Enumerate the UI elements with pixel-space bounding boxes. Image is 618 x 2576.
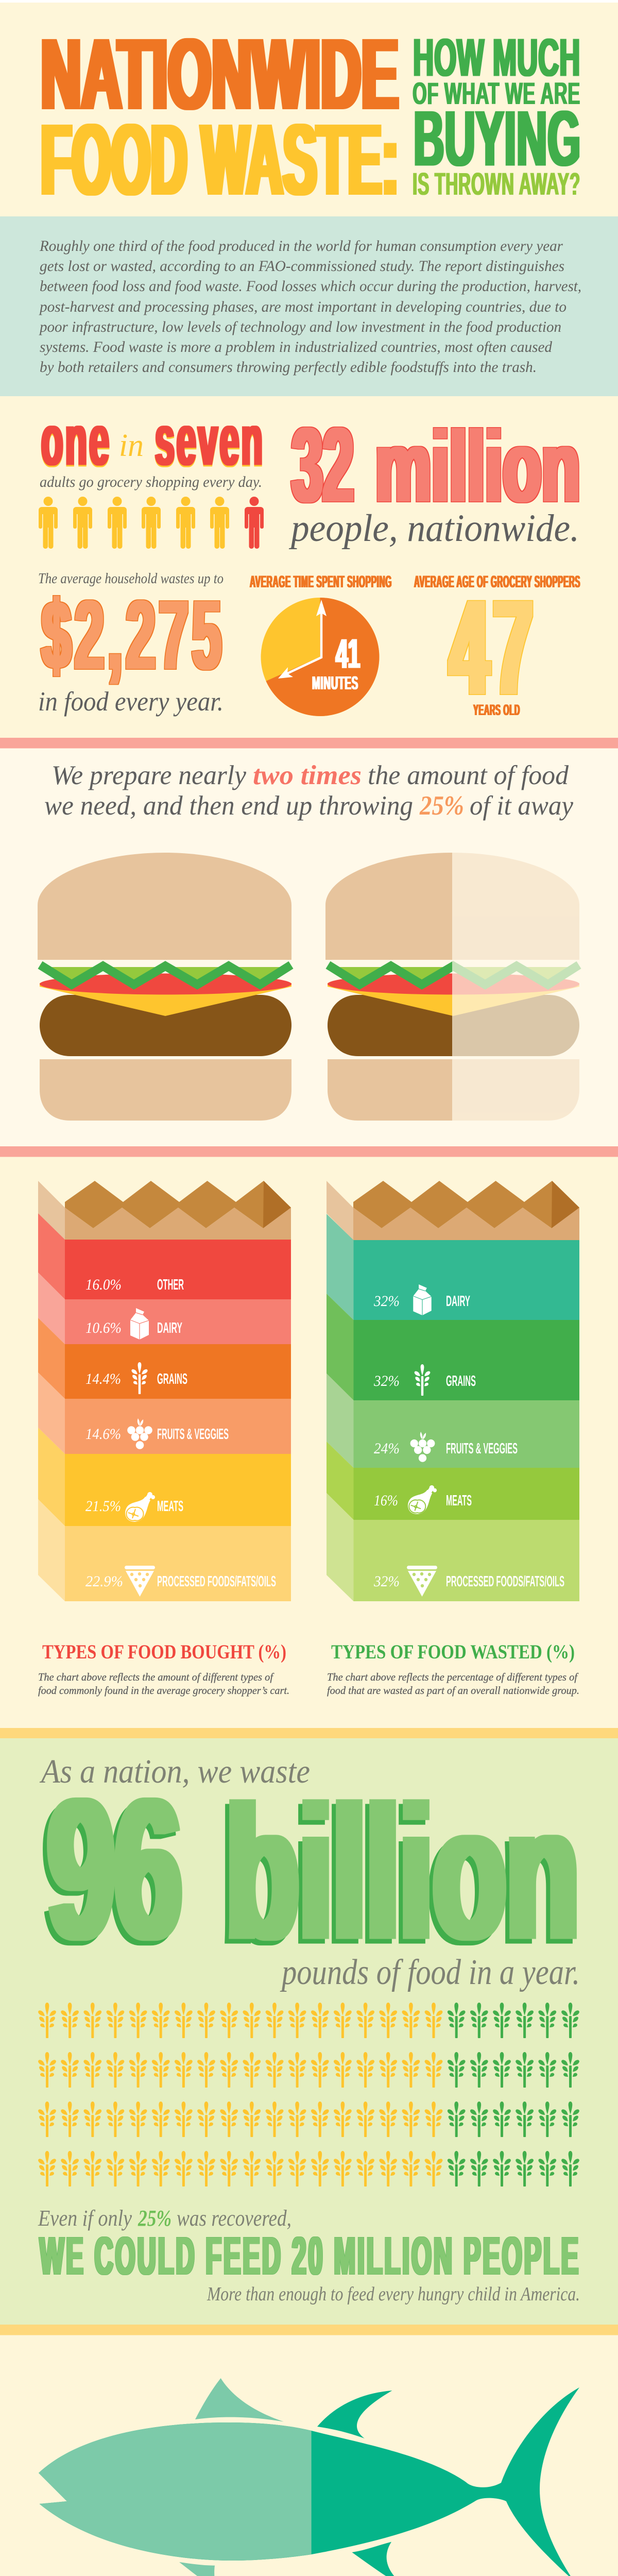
heading: two times — [44, 760, 573, 821]
heading: two times: two times — [253, 760, 362, 790]
heading: two times: of it away — [470, 791, 573, 821]
caption: bought description — [38, 1671, 289, 1697]
icon: whole burger — [38, 853, 291, 1121]
text: AVERAGE TIME SPENT SHOPPING — [250, 572, 392, 591]
fish: dorsal fin — [317, 2391, 392, 2438]
row: meats: 16% — [374, 1492, 398, 1509]
caption: wasted description — [327, 1671, 579, 1697]
heading: types of food wasted: TYPES OF FOOD WASTED (%) — [331, 1641, 575, 1663]
row: fruits and veggies: FRUITS & VEGGIES — [446, 1440, 518, 1457]
row: fruits and veggies: FRUITS & VEGGIES — [157, 1426, 229, 1443]
panel: bag section background — [0, 1157, 618, 1728]
panel: intro background — [0, 216, 618, 396]
icon: fish — [39, 2378, 579, 2576]
row: grains: 32% — [373, 1372, 400, 1389]
chart: food wasted bag — [327, 1181, 579, 1601]
icon: burger kept half — [325, 853, 452, 1121]
row: dairy: DAIRY — [446, 1293, 470, 1310]
row: dairy — [85, 1308, 182, 1340]
caption: average household: The average household wastes up to — [38, 571, 224, 587]
text: seven — [155, 401, 265, 482]
caption: even if only 25 percent — [38, 2206, 291, 2231]
intro paragraph: by both retailers and consumers throwing perfectly edible foodstuffs into the trash. — [40, 359, 537, 376]
row: fruits and veggies: 24% — [374, 1440, 400, 1457]
stat: one in seven: one — [41, 401, 111, 482]
panel: burger section background — [0, 738, 618, 1157]
row: dairy: 10.6% — [85, 1319, 122, 1336]
caption: bought description: The chart above reflects the amount of different types of — [38, 1671, 274, 1683]
stat: 32 million: 32 — [292, 406, 354, 524]
stripe — [0, 738, 618, 748]
stat: one in seven — [41, 399, 265, 482]
row: fruits and veggies — [85, 1418, 229, 1449]
text: seven — [155, 399, 265, 480]
row: other: 16.0% — [85, 1276, 122, 1293]
row: other: OTHER — [157, 1277, 184, 1293]
row: processed foods: PROCESSED FOODS/FATS/OILS — [157, 1573, 276, 1590]
caption: wasted description: The chart above reflects the percentage of different types of — [327, 1671, 579, 1683]
caption: even if only 25 percent: 25% — [138, 2206, 171, 2231]
intro paragraph: post-harvest and processing phases, are most important in developing countries, due to — [39, 298, 566, 315]
intro paragraph: gets lost or wasted, according to an FAO-commissioned study. The report distinguishes — [40, 258, 564, 275]
row: other — [85, 1276, 184, 1293]
clock chart: 41 minutes: MINUTES — [312, 672, 358, 693]
row: dairy — [373, 1284, 470, 1315]
row: meats: MEATS — [446, 1493, 472, 1509]
panel: 96 billion background — [0, 1728, 618, 2335]
intro paragraph: between food loss and food waste. Food losses which occur during the production, harvest, — [40, 278, 581, 295]
heading: two times: the amount of food — [368, 760, 569, 790]
row: meats — [374, 1485, 472, 1514]
caption: bought description: food commonly found in the average grocery shopper’s cart. — [38, 1684, 289, 1697]
clock chart: 41 minutes: 41 — [336, 631, 360, 676]
title — [41, 18, 581, 216]
caption: even if only 25 percent: Even if only — [38, 2206, 132, 2231]
icon: faded half burger — [325, 853, 579, 1121]
row: meats: MEATS — [157, 1498, 183, 1515]
caption: wasted description: food that are wasted as part of an overall nationwide group. — [327, 1684, 579, 1697]
stat: one in seven: one — [41, 399, 111, 480]
chart: food bought bag — [38, 1181, 291, 1601]
row: fruits and veggies — [374, 1432, 518, 1462]
heading: two times: We prepare nearly — [52, 760, 246, 790]
top white strip — [0, 0, 618, 3]
row: dairy: DAIRY — [157, 1320, 182, 1336]
text: YEARS OLD — [473, 702, 520, 719]
row: processed foods: 22.9% — [85, 1573, 123, 1590]
row: dairy: 32% — [373, 1293, 400, 1310]
row: grains: GRAINS — [446, 1373, 476, 1389]
fish: rear belly fin — [352, 2542, 416, 2576]
row: fruits and veggies: 14.6% — [85, 1426, 121, 1443]
row: grains: GRAINS — [157, 1371, 187, 1387]
fish: discarded tail half — [39, 2387, 579, 2576]
intro paragraph: systems. Food waste is more a problem in industrialized countries, most often caused — [40, 338, 553, 355]
heading: two times: we need, and then end up throwing — [44, 791, 413, 821]
caption: in food every year: in food every year. — [38, 687, 224, 717]
intro paragraph — [39, 238, 581, 376]
icon grid: wheat, 75 percent yellow, 25 percent green — [38, 2003, 579, 2187]
stat: one in seven: in — [119, 428, 144, 463]
row: grains — [85, 1362, 187, 1394]
stat: 96 billion — [44, 1757, 579, 1986]
stat: 2275 dollars: $2,275 — [42, 581, 225, 690]
stat: 47: 47 — [450, 572, 538, 723]
heading: types of food bought: TYPES OF FOOD BOUGHT (%) — [42, 1641, 286, 1663]
clock chart: 41 minutes — [261, 598, 379, 716]
caption: people nationwide: people, nationwide. — [288, 507, 579, 550]
fish: head half — [39, 2422, 312, 2561]
row: meats — [85, 1492, 183, 1522]
stat: 96 billion: 96 — [48, 1757, 182, 1981]
row: grains: 14.4% — [85, 1370, 121, 1387]
stripe — [0, 2325, 618, 2335]
caption: adults go grocery shopping: adults go grocery shopping every day. — [40, 473, 262, 490]
row: meats: 21.5% — [85, 1498, 121, 1515]
heading: two times: 25% — [419, 791, 464, 821]
fish: top fin — [195, 2378, 284, 2421]
stripe — [0, 1728, 618, 1738]
caption: even if only 25 percent: was recovered, — [177, 2206, 291, 2231]
icons: seven people — [39, 497, 264, 549]
fish: front belly fin — [179, 2562, 216, 2576]
row: processed foods — [373, 1566, 564, 1597]
intro paragraph: poor infrastructure, low levels of technology and low investment in the food production — [39, 318, 561, 335]
intro paragraph: Roughly one third of the food produced in the world for human consumption every year — [39, 238, 563, 255]
panel: fish section background — [0, 2335, 618, 2576]
stripe — [0, 1146, 618, 1157]
row: processed foods: 32% — [373, 1573, 400, 1590]
stat: 32 million — [292, 406, 580, 524]
caption: as a nation: As a nation, we waste — [39, 1753, 310, 1790]
row: grains — [373, 1364, 476, 1396]
stat: 96 billion: 96 — [44, 1762, 178, 1986]
row: processed foods — [85, 1566, 276, 1597]
